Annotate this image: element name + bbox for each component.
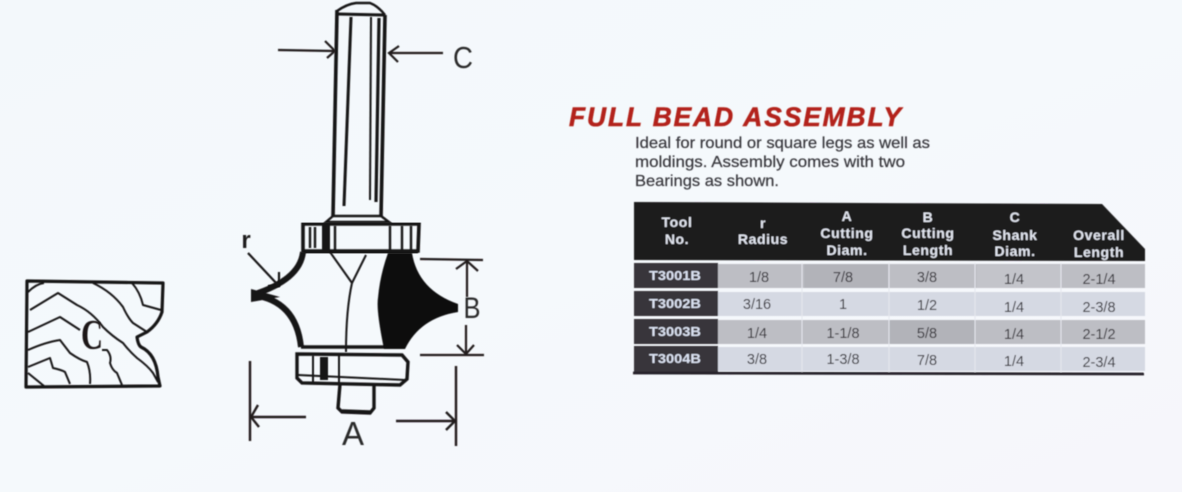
table row: T3003B [634,319,1145,344]
table: specifications [633,202,1145,374]
table header: Overall [1073,227,1125,243]
table row: T3002B: 3/16 [743,297,771,313]
table column separators and bottom rule [633,263,1144,374]
table row: T3003B: 1-1/8 [826,326,860,342]
table row: T3002B: 2-3/8 [1082,300,1116,316]
arrow: radius r pointer [248,253,279,286]
table header: Length [1074,244,1124,260]
table row: T3001B: 3/8 [917,270,937,286]
label: r: r [241,227,251,254]
icon: wood profile cross-section [26,281,163,387]
table row: T3002B: 1/4 [1004,300,1024,316]
table row: T3004B: 1/4 [1004,354,1024,370]
table row: T3001B [634,263,1145,288]
table row: T3001B: 7/8 [833,270,853,286]
table row: T3003B: 1/4 [1004,327,1024,343]
table header: Radius [738,231,788,247]
table row: T3004B: T3004B [649,352,701,366]
text block: description [635,135,930,190]
icon: router bit cutter body [251,252,458,352]
table row: T3002B [634,291,1145,316]
label: C: C [453,40,473,75]
arrow: dimension C [278,41,443,62]
table row: T3002B: 1/2 [917,298,937,314]
arrow: dimension B [420,259,484,355]
table header: Tool [662,214,692,230]
table header: Diam. [826,242,868,258]
table header [634,202,1145,261]
icon: router bit collar [303,224,419,252]
table header: Cutting [901,225,955,241]
table header: r [760,215,766,231]
table header: A [842,208,852,224]
table row: T3003B: 2-1/2 [1082,327,1116,343]
table header: No. [665,231,689,247]
icon: router bit shank [326,3,389,222]
table header: Length [903,242,953,258]
table row: T3004B: 3/8 [747,352,767,368]
table row: T3003B: 5/8 [917,326,937,342]
table row: T3001B: 2-1/4 [1082,272,1116,288]
table row: T3004B: 7/8 [917,353,937,369]
table row: T3001B: T3001B [649,269,701,283]
label: B: B [464,292,480,325]
arrow: dimension A [250,361,456,446]
table row: T3002B: 1 [839,297,847,313]
table row: T3004B [634,346,1145,372]
table row: T3003B: 1/4 [747,326,767,342]
text block: description: moldings. Assembly comes with two [635,154,905,171]
text block: description: Ideal for round or square legs as well as [635,135,930,152]
table row: T3003B: T3003B [649,325,701,339]
text: C label on wood profile: C [81,313,103,359]
table row: T3002B: T3002B [649,297,701,311]
table header: Cutting [820,225,874,241]
label: A: A [342,415,364,452]
table row: T3004B: 2-3/4 [1082,355,1116,371]
title: FULL BEAD ASSEMBLY [569,102,904,132]
icon: lower bearing [297,354,408,413]
table header: B [923,209,933,225]
table row: T3001B: 1/8 [749,270,769,286]
table row: T3004B: 1-3/8 [826,352,860,368]
table header: Shank [992,227,1038,243]
table header: Diam. [994,243,1036,259]
table header: C [1010,209,1020,225]
table row: T3001B: 1/4 [1004,272,1024,288]
text block: description: Bearings as shown. [635,173,779,190]
